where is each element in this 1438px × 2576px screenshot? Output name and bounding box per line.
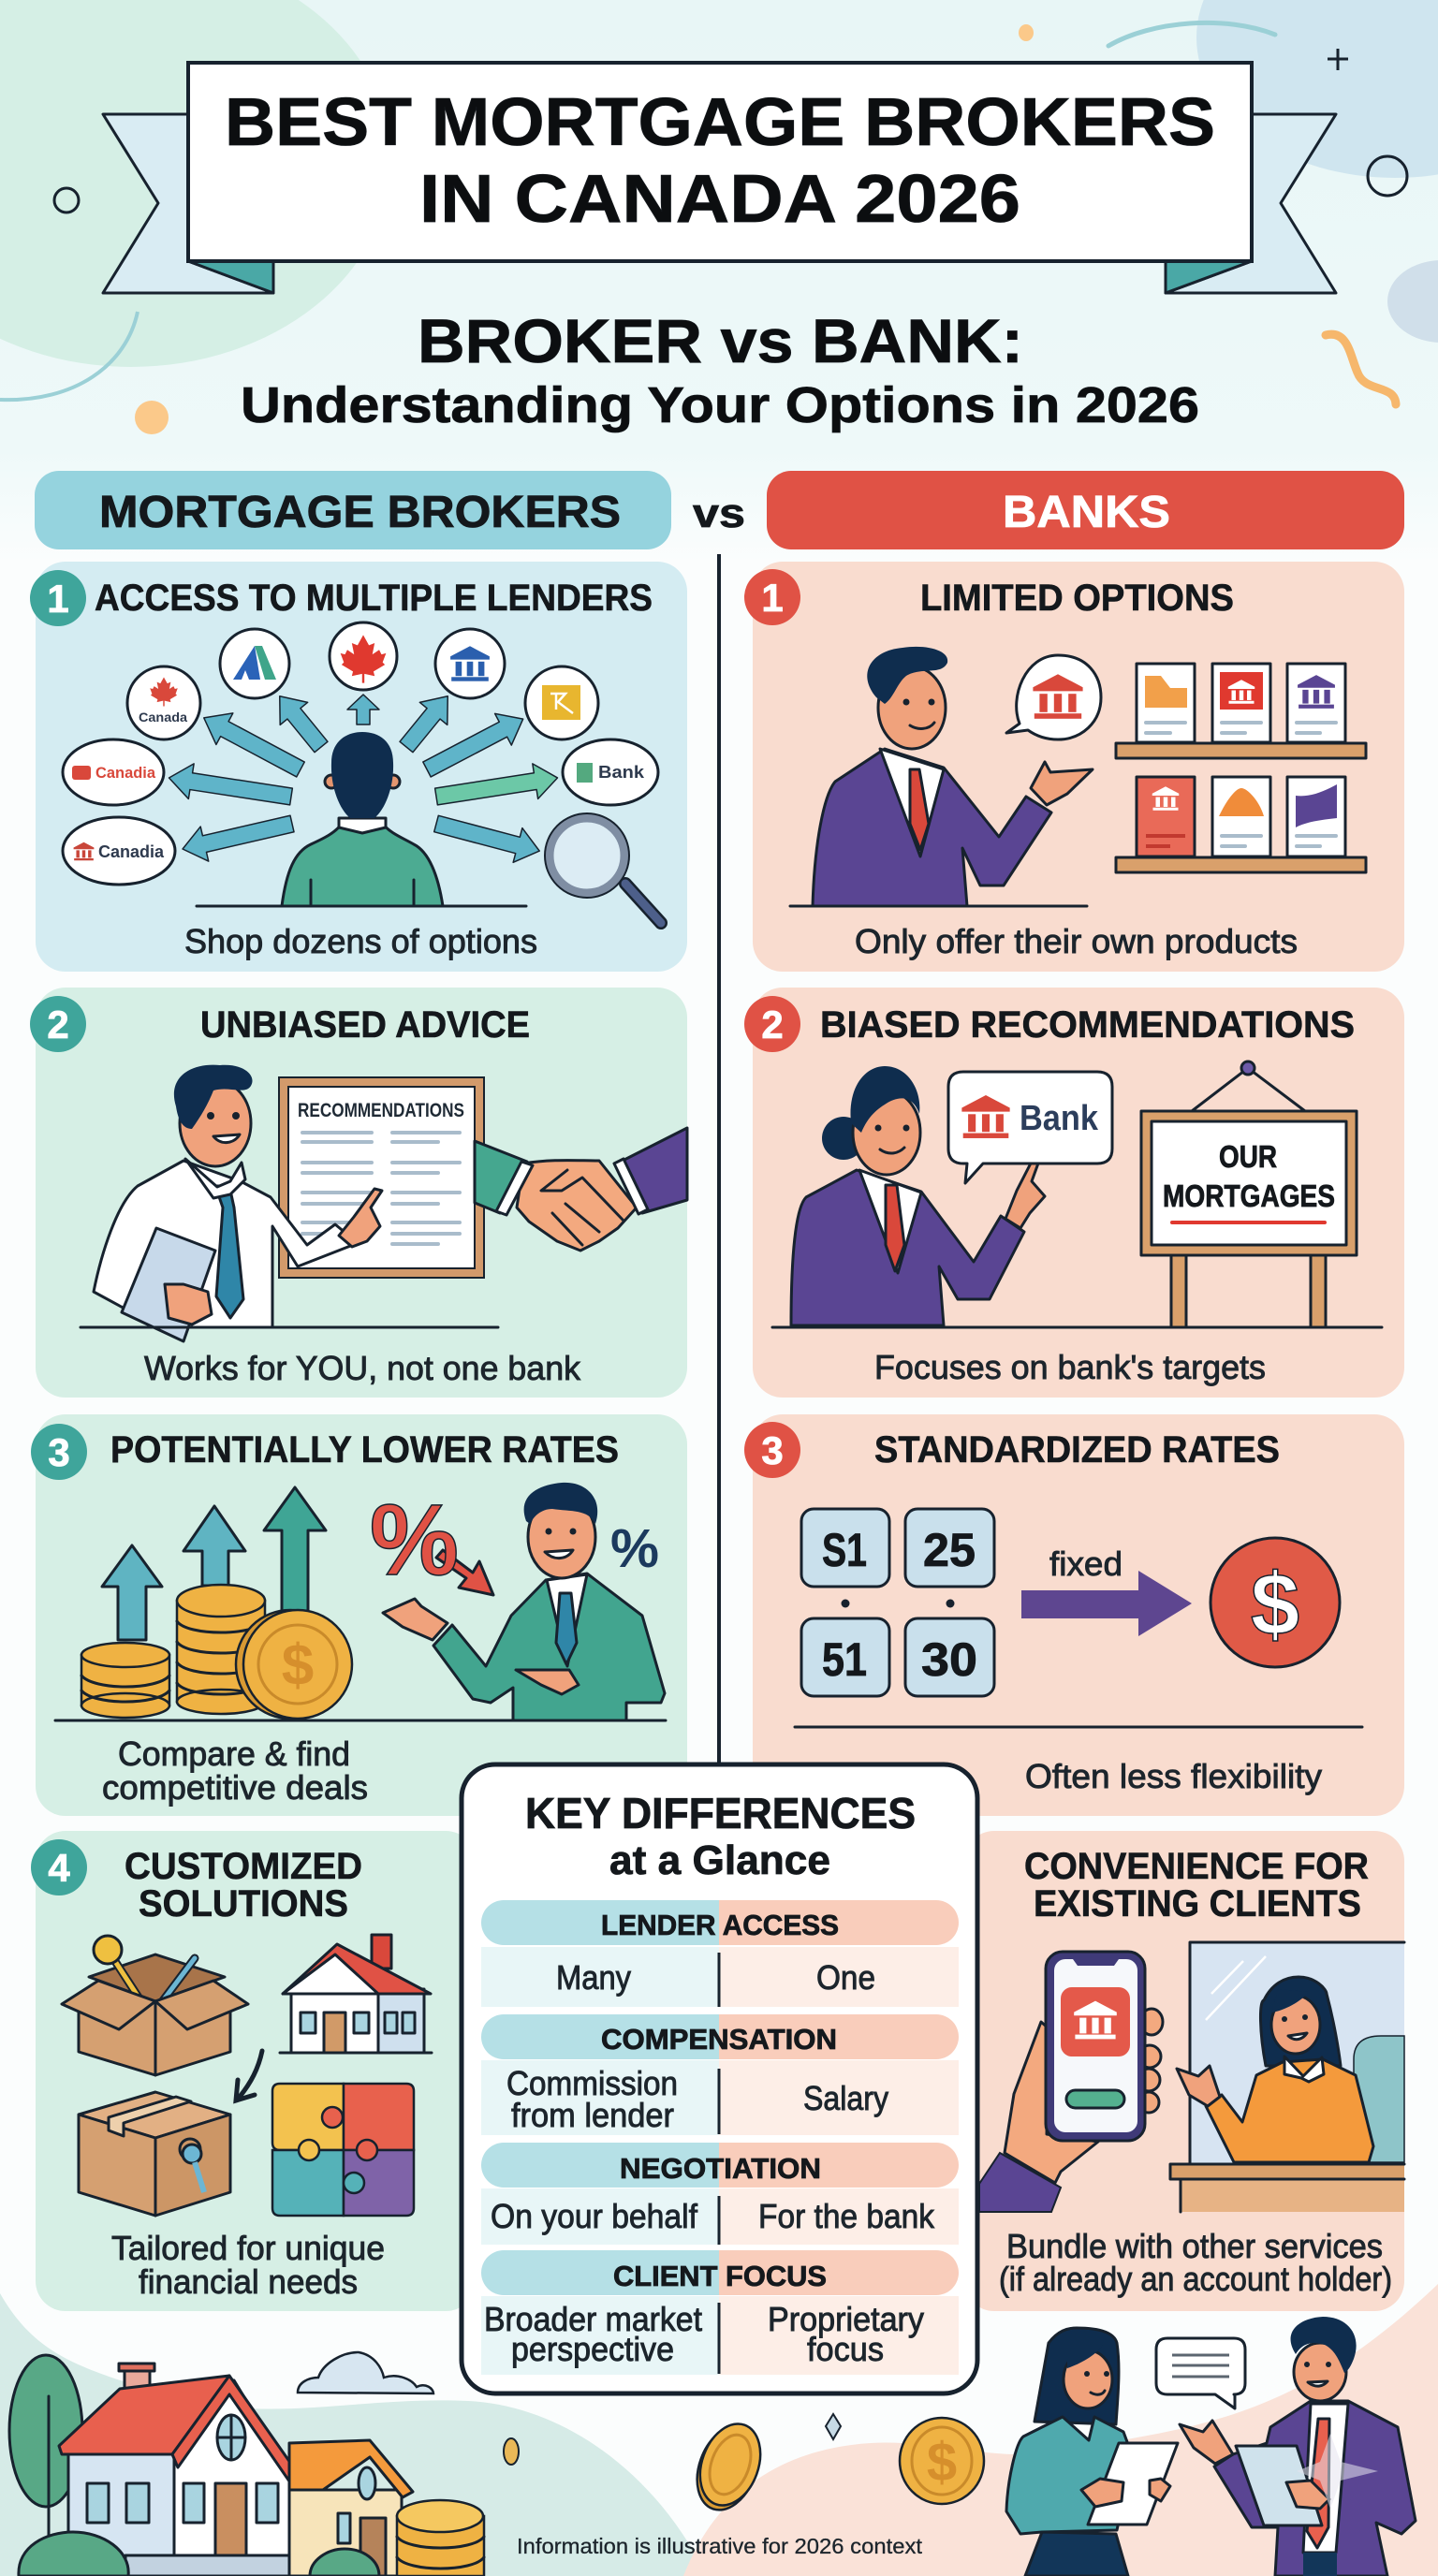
banker woman: [772, 1066, 1382, 1327]
recommendations board: RECOMMENDATIONS: [298, 1100, 464, 1121]
coin stacks: $: [282, 1633, 314, 1698]
rate tiles: [801, 1509, 994, 1696]
row: client focus: [481, 2250, 959, 2375]
panel: bank 1 limited options: [744, 562, 1404, 972]
badge 2: [30, 996, 86, 1052]
curved arrow: [236, 2051, 262, 2100]
our mortgages sign: OUR: [1219, 1139, 1277, 1174]
caption: Bundle with other services: [1006, 2227, 1383, 2265]
key differences box: [462, 1764, 977, 2393]
arrows to lenders: [167, 685, 560, 868]
badge 4: [31, 1839, 87, 1895]
caption: Compare & find: [118, 1734, 350, 1773]
fixed arrow: [1021, 1571, 1192, 1636]
speech bubble: bank: [948, 1072, 1112, 1183]
subtitle: BROKER vs BANK:: [418, 306, 1023, 375]
panel: bank 3 standardized rates: [744, 1414, 1404, 1816]
footer: diamond: [826, 2414, 841, 2439]
caption: Works for YOU, not one bank: [144, 1349, 581, 1387]
heading: UNBIASED ADVICE: [200, 1004, 530, 1046]
caption: Often less flexibility: [1025, 1757, 1322, 1795]
badge 3: 3: [761, 1428, 784, 1472]
row: client focus: CLIENT FOCUS: [613, 2260, 827, 2292]
person seen from behind: [197, 732, 526, 906]
dollar coin: [1211, 1538, 1340, 1667]
row: compensation: [481, 2014, 959, 2135]
center divider: [717, 554, 721, 1769]
row: compensation: from lender: [511, 2096, 674, 2134]
footer: small house: [289, 2440, 413, 2576]
advisor man with folder: [81, 1065, 498, 1341]
lender logo circles: Canadia: [95, 764, 156, 782]
column header: mortgage brokers: MORTGAGE BROKERS: [99, 488, 621, 537]
row: client focus: Broader market: [484, 2300, 702, 2338]
row: lender access: Many: [556, 1958, 631, 1997]
falling percent sign: %: [370, 1483, 459, 1596]
column header: banks: [767, 471, 1404, 549]
banker man: [790, 647, 1093, 906]
caption: [111, 2229, 385, 2301]
badge 1: 1: [761, 576, 784, 620]
footer note: Information is illustrative for 2026 context: [517, 2534, 923, 2558]
footer: woman with paper: [1006, 2328, 1178, 2576]
row: compensation: Salary: [803, 2079, 888, 2117]
caption: [999, 2227, 1392, 2298]
panel: bank 4 convenience: [964, 1831, 1404, 2311]
lender logo circles: Canadia: [98, 842, 165, 861]
row: negotiation: For the bank: [758, 2197, 935, 2235]
badge 1: 1: [47, 577, 69, 621]
heading: LIMITED OPTIONS: [920, 578, 1234, 619]
decorative shapes: top: [0, 22, 1407, 434]
title ribbon: [103, 63, 1336, 293]
panel: broker 3 potentially lower rates: [31, 1414, 687, 1816]
caption: Tailored for unique: [111, 2229, 385, 2267]
advisor man in green suit: [383, 1483, 665, 1720]
dollar coin: $: [1251, 1555, 1299, 1653]
heading: POTENTIALLY LOWER RATES: [110, 1429, 619, 1471]
caption: competitive deals: [102, 1768, 368, 1807]
title: IN CANADA 2026: [419, 162, 1020, 237]
badge 3: [744, 1422, 800, 1478]
badge 3: 3: [48, 1430, 70, 1474]
puzzle: [272, 2084, 414, 2216]
row: lender access: [481, 1900, 959, 2007]
caption: Only offer their own products: [855, 922, 1298, 960]
lender logo circles: [63, 622, 658, 885]
row: client focus: perspective: [511, 2330, 674, 2368]
speech bubble with bank icon: [1006, 655, 1101, 739]
row: negotiation: NEGOTIATION: [620, 2152, 821, 2185]
title: BEST MORTGAGE BROKERS: [225, 85, 1215, 160]
rate tiles: S1: [822, 1524, 867, 1576]
caption: Shop dozens of options: [184, 922, 537, 960]
panel: broker 1 access to multiple lenders: [30, 562, 687, 972]
badge 2: 2: [761, 1003, 784, 1046]
rate tiles: 25: [923, 1524, 976, 1576]
footer: cloud: [298, 2352, 433, 2393]
panel: bank 2 biased recommendations: [744, 988, 1404, 1398]
row: client focus: Proprietary: [768, 2300, 924, 2338]
counter: [1170, 2164, 1404, 2212]
row: negotiation: [481, 2143, 959, 2245]
product shelves: [1116, 664, 1366, 872]
heading: ACCESS TO MULTIPLE LENDERS: [95, 578, 653, 619]
subtitle: Understanding Your Options in 2026: [241, 377, 1199, 433]
row: negotiation: On your behalf: [491, 2197, 698, 2235]
ground line: [795, 1726, 1362, 1728]
closed box with key: [79, 2092, 230, 2216]
badge 1: [30, 570, 86, 626]
footer: speech bubble: [1156, 2338, 1245, 2408]
heading: [1024, 1846, 1369, 1925]
heading: CONVENIENCE FOR: [1024, 1846, 1369, 1887]
box title: at a Glance: [609, 1837, 830, 1883]
footer: dollar coin: [900, 2418, 984, 2504]
small percent sign: %: [610, 1518, 659, 1579]
badge 2: [744, 996, 800, 1052]
row: compensation: COMPENSATION: [601, 2023, 837, 2056]
speech bubble: bank: Bank: [1020, 1099, 1099, 1138]
footer: dollar coin: $: [927, 2432, 957, 2493]
column header: mortgage brokers: [35, 471, 671, 549]
footer: coin stack: [397, 2500, 484, 2576]
watermark sparkle: [1297, 2434, 1378, 2509]
badge 2: 2: [47, 1003, 69, 1046]
open box with keys: [62, 1936, 248, 2075]
panel: broker 2 unbiased advice: [30, 988, 687, 1398]
heading: STANDARDIZED RATES: [874, 1429, 1280, 1471]
badge 4: 4: [48, 1846, 70, 1890]
heading: BIASED RECOMMENDATIONS: [820, 1004, 1355, 1046]
badge 3: [31, 1424, 87, 1480]
hand with phone: [979, 1952, 1163, 2212]
heading: EXISTING CLIENTS: [1034, 1883, 1361, 1925]
footer: small gold dot: [504, 2438, 519, 2465]
growth arrows: [102, 1487, 326, 1640]
footer: bushes: [19, 2532, 379, 2576]
footer: tilted coin: [686, 2415, 771, 2518]
caption: [102, 1734, 368, 1807]
row: client focus: focus: [807, 2330, 884, 2368]
row: compensation: Commission: [506, 2064, 678, 2102]
heading: CUSTOMIZED: [125, 1846, 362, 1887]
heading: SOLUTIONS: [139, 1883, 348, 1925]
row: lender access: LENDER ACCESS: [601, 1909, 839, 1941]
handshake: [475, 1128, 687, 1251]
rate tiles: 51: [822, 1633, 867, 1686]
our mortgages sign: [1141, 1061, 1357, 1327]
lender logo circles: Bank: [598, 763, 645, 782]
subtitle: [241, 306, 1199, 433]
magnifying glass: [545, 813, 661, 923]
lender logo circles: Canada: [139, 710, 187, 724]
rate tiles: 30: [921, 1633, 977, 1686]
vs label: vs: [693, 490, 745, 536]
badge 1: [744, 569, 800, 625]
panel: broker 4 customized solutions: [31, 1831, 476, 2311]
footer: tree: [9, 2355, 82, 2576]
caption: (if already an account holder): [999, 2260, 1392, 2298]
footer: man with tablet: [1180, 2317, 1416, 2576]
footer: main house: [59, 2364, 301, 2576]
box title: [525, 1789, 916, 1883]
our mortgages sign: MORTGAGES: [1163, 1178, 1335, 1213]
column header: banks: BANKS: [1003, 488, 1170, 537]
fixed label: fixed: [1049, 1544, 1123, 1583]
recommendations board: [279, 1077, 484, 1278]
coin stacks: [55, 1585, 666, 1720]
caption: Focuses on bank's targets: [874, 1348, 1266, 1386]
teller window: [1177, 1942, 1404, 2164]
row: lender access: One: [816, 1958, 875, 1997]
box title: KEY DIFFERENCES: [525, 1789, 916, 1837]
heading: [125, 1846, 362, 1925]
caption: financial needs: [139, 2262, 358, 2301]
house: [280, 1935, 432, 2053]
title: [225, 85, 1215, 237]
